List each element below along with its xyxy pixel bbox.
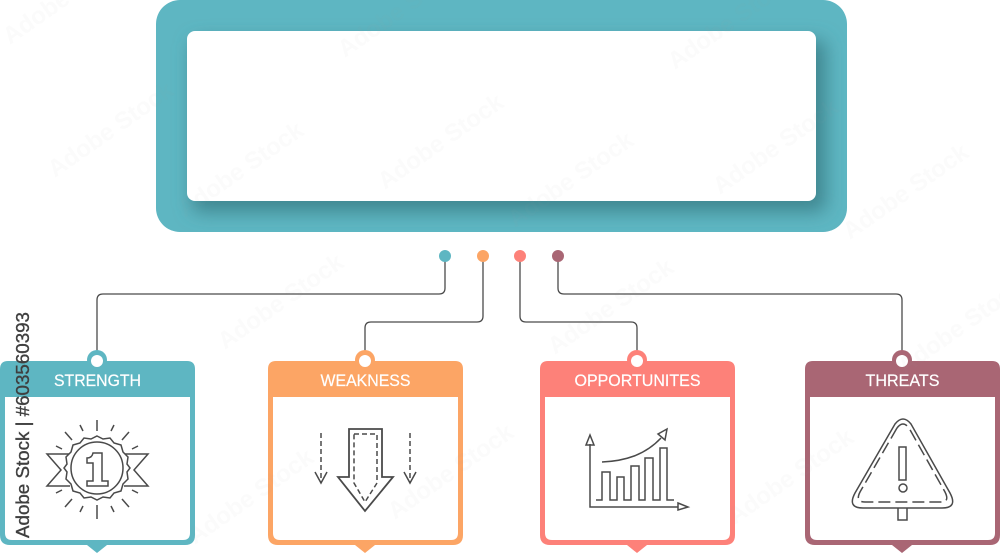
watermark text: Adobe Stock	[838, 138, 974, 245]
icon: growth chart	[586, 429, 688, 510]
heading: weakness: WEAKNESS	[320, 372, 410, 390]
heading: strength: STRENGTH	[54, 372, 141, 390]
icon: warning triangle	[852, 419, 953, 520]
panel: threats	[805, 350, 1000, 553]
icon: down arrow	[315, 429, 416, 511]
main teal panel	[156, 0, 847, 232]
watermark text: Adobe Stock	[173, 116, 309, 223]
watermark text: Adobe Stock	[183, 443, 319, 550]
heading: threats: THREATS	[866, 372, 940, 390]
heading: opportunities: OPPORTUNITES	[574, 372, 700, 390]
watermark text: Adobe Stock	[383, 418, 519, 525]
side watermark text: Adobe Stock | #603560393	[13, 312, 33, 538]
connector dot and line: threats	[552, 250, 902, 352]
connector dot and line: strength	[97, 250, 451, 352]
connector dot and line: opportunities	[514, 250, 637, 352]
panel: strength	[0, 350, 195, 553]
watermark text: Adobe Stock	[213, 248, 349, 355]
icon: medal	[47, 420, 148, 519]
watermark text: Adobe Stock	[373, 88, 509, 195]
watermark text: Adobe Stock	[43, 76, 179, 183]
panel: opportunities	[540, 350, 735, 553]
panel: weakness	[268, 350, 463, 553]
connector dot and line: weakness	[365, 250, 489, 352]
main panel white content box	[187, 31, 816, 201]
watermark text: Adobe Stock	[503, 126, 639, 233]
watermark text: Adobe Stock	[543, 253, 679, 360]
watermark text: Adobe Stock	[708, 93, 844, 200]
watermark text: Adobe Stock	[723, 423, 859, 530]
